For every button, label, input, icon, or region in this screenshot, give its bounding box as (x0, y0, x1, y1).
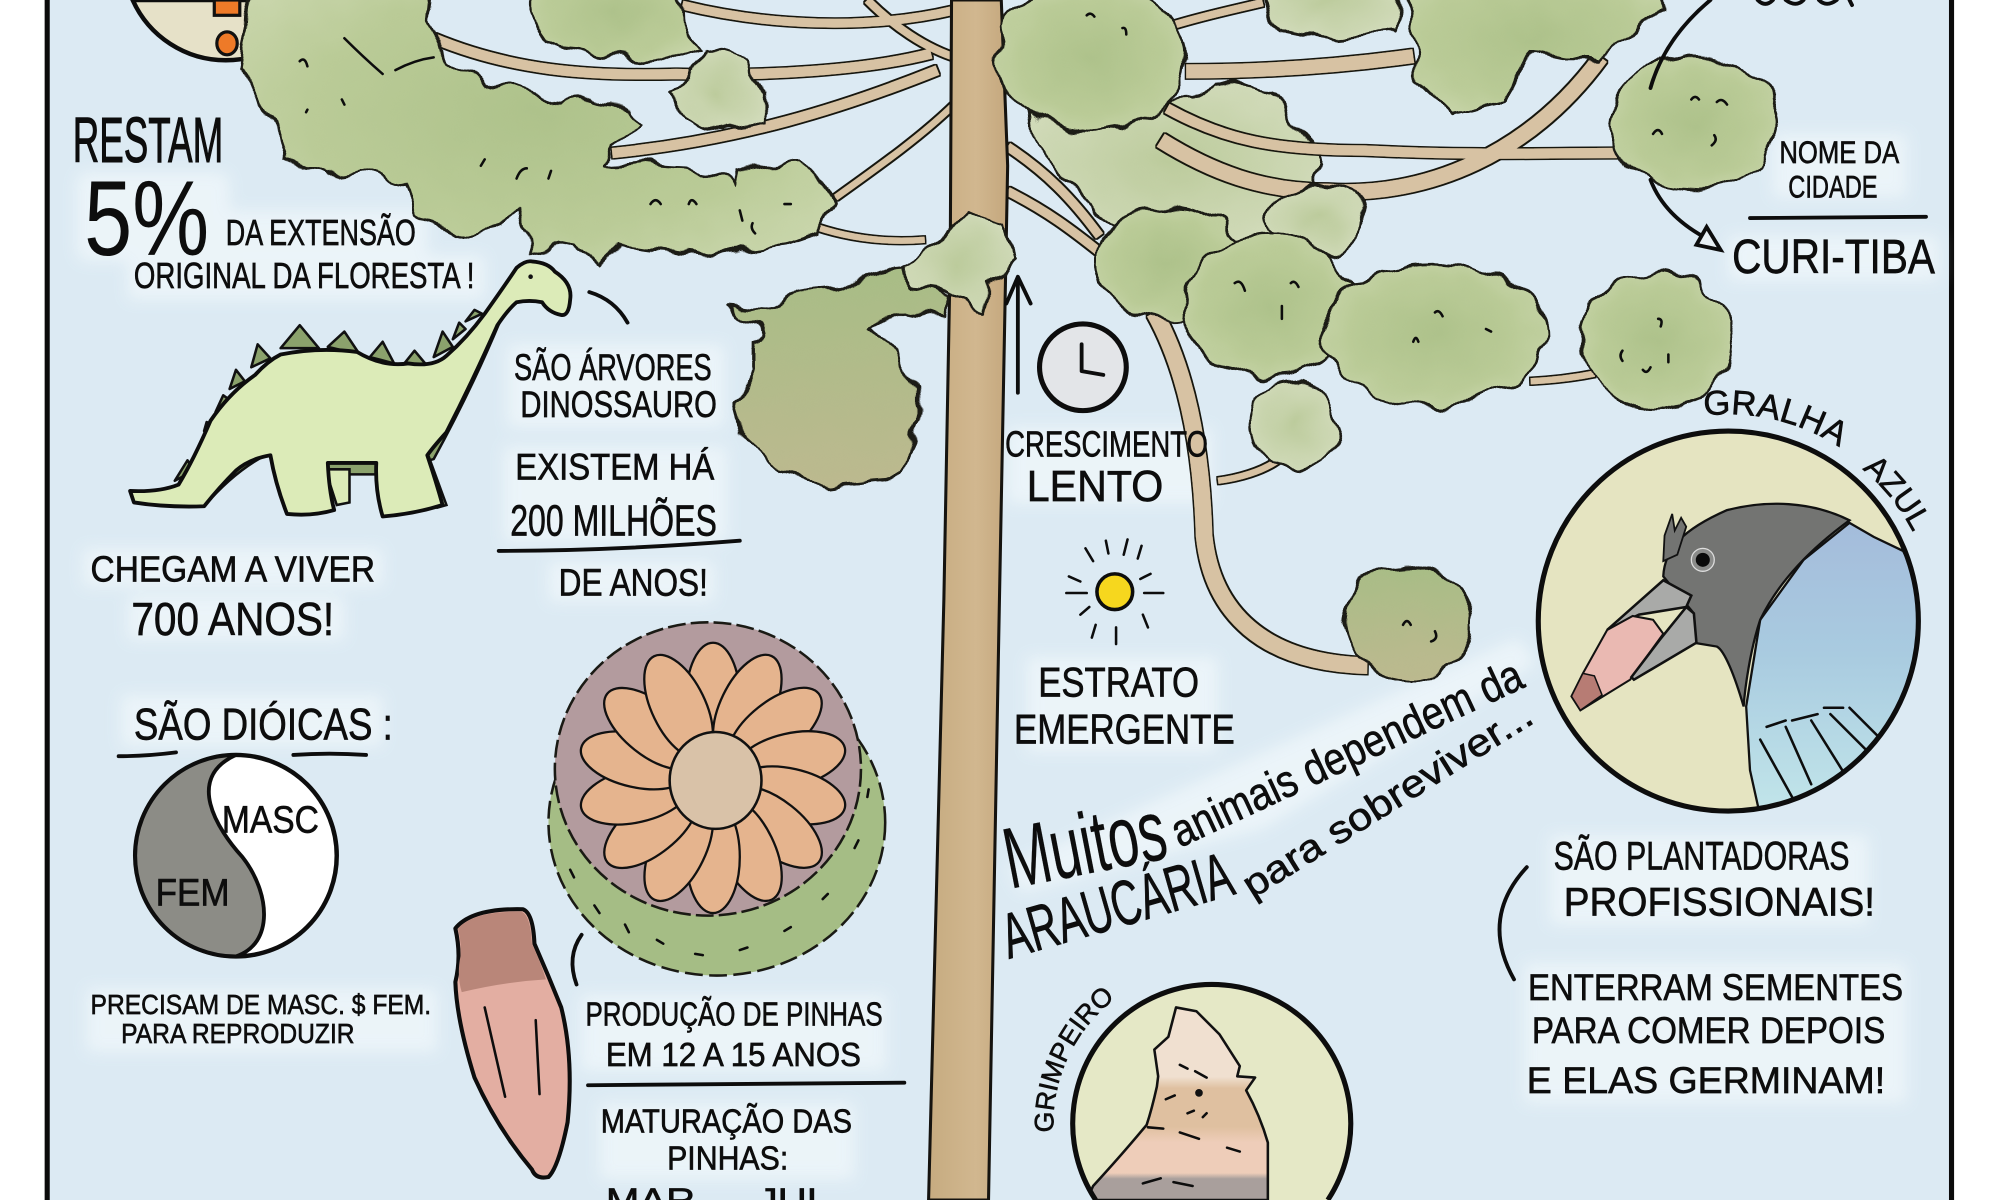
top-left medallion (133, 0, 319, 60)
caption: dioecious (91, 989, 431, 1049)
arrow head (1696, 227, 1721, 250)
cone core (670, 732, 761, 829)
dinosaur eye (528, 274, 533, 279)
dinosaur back spikes (175, 310, 482, 481)
divider (588, 1083, 904, 1085)
pupil (1696, 553, 1710, 567)
line: PINHAS: (667, 1140, 788, 1177)
dinosaur body (130, 261, 570, 516)
foliage: cluster D (1324, 263, 1546, 406)
icon: orange marks (214, 0, 240, 55)
text block: 700 years (91, 550, 375, 645)
line: PRODUÇÃO DE PINHAS (585, 995, 883, 1033)
line: CHEGAM A VIVER (91, 550, 375, 590)
bird (1571, 504, 1939, 816)
clock hands (1082, 344, 1103, 375)
pine seed in beak (1571, 616, 1663, 710)
foliage: pale small (670, 50, 765, 131)
medallion circle (133, 0, 319, 60)
cut-off text at top (1758, 0, 1852, 5)
body (1087, 1007, 1268, 1200)
heading: RESTAM 5% (73, 104, 474, 296)
illustration: grimpeiro (1073, 984, 1351, 1200)
arrow: curved to city name (1651, 0, 1710, 240)
foliage: cluster B (1267, 187, 1366, 254)
foliage: top centre (529, 0, 702, 64)
clock face (1040, 324, 1126, 411)
sun rays (1066, 539, 1163, 644)
white half (135, 755, 337, 956)
heading: dioicas (119, 700, 393, 756)
heading text: SÃO DIÓICAS : (134, 700, 393, 750)
line: EXISTEM HÁ (515, 446, 715, 487)
seed lines (485, 1007, 540, 1097)
line: PARA REPRODUZIR (121, 1018, 355, 1049)
text block: planters (1500, 835, 1903, 1101)
text block: pine production (585, 995, 904, 1200)
line: LENTO (1027, 463, 1163, 511)
line: MATURAÇÃO DAS (601, 1102, 852, 1140)
caption line 2: ORIGINAL DA FLORESTA ! (134, 256, 474, 296)
grey head and neck (1663, 504, 1849, 706)
foliage: cluster E (1580, 272, 1731, 409)
cone green marks (570, 789, 869, 955)
GRALHA: GRALHA (1704, 390, 1844, 448)
seed body (455, 909, 570, 1178)
icon: sun (1066, 539, 1163, 644)
percentage: 5% (84, 158, 209, 278)
foliage: lower left (730, 268, 950, 486)
line: CRESCIMENTO (1005, 425, 1208, 465)
foliage: top right of trunk (997, 0, 1186, 131)
foliage: cluster G (1250, 381, 1337, 468)
foliage: cluster C (1182, 236, 1356, 376)
callout stroke: dinosaur (589, 292, 628, 323)
illustration: pine cone (548, 622, 885, 976)
title arc: gralha azul (1704, 390, 1927, 532)
line: EM 12 A 15 ANOS (606, 1037, 861, 1074)
eye (1195, 1089, 1203, 1097)
line: PARA COMER DEPOIS (1532, 1010, 1885, 1051)
para sobreviver: para sobreviver... (1235, 693, 1541, 907)
icon: yin yang (135, 755, 337, 956)
blue body (1745, 522, 1916, 806)
text block: city name (1732, 134, 1936, 284)
foliage: cluster A (1094, 207, 1242, 319)
medallion (1073, 984, 1351, 1200)
line: NOME DA (1779, 134, 1900, 170)
line: CIDADE (1788, 169, 1878, 205)
bracket (1500, 867, 1527, 979)
head marks (1143, 1065, 1240, 1186)
divider (499, 541, 740, 551)
eye (1691, 548, 1714, 571)
medallion ring (1073, 984, 1351, 1200)
seed tip (1571, 673, 1602, 710)
text block: emergent stratum (1014, 658, 1235, 752)
illustration: gralha azul (1538, 431, 1939, 816)
foliage: cluster H (1346, 565, 1473, 677)
line: SÃO ÁRVORES (514, 347, 712, 388)
foliage marks (300, 14, 1727, 641)
lower beak (1631, 607, 1696, 680)
MASC label: MASC (222, 799, 319, 842)
underline marks (119, 752, 366, 756)
dinosaur far side (204, 321, 500, 506)
animais dependem da: animais dependem da (1162, 648, 1531, 857)
seed cap (458, 912, 546, 992)
icon: dinosaur (130, 261, 570, 516)
line: EMERGENTE (1014, 705, 1235, 752)
foliage: near trunk (908, 210, 1014, 312)
arrow: slow growth (1006, 277, 1031, 393)
divider (1750, 217, 1926, 218)
line: E ELAS GERMINAM! (1527, 1060, 1885, 1101)
FEM label: FEM (156, 871, 230, 914)
callout stroke: seed (572, 935, 582, 984)
line: SÃO PLANTADORAS (1554, 835, 1849, 879)
ARAUCARIA: ARAUCÁRIA (993, 838, 1241, 972)
pale back foliage (1026, 80, 1319, 242)
foliage clusters (242, 0, 1777, 677)
AZUL: AZUL (1862, 458, 1927, 532)
foliage: top strip (1255, 0, 1403, 38)
line: DE ANOS! (559, 562, 708, 605)
bird (1087, 1007, 1268, 1200)
line: PRECISAM DE MASC. $ FEM. (91, 989, 431, 1020)
grey half (135, 755, 264, 956)
crest (1663, 514, 1686, 561)
foliage: large left mass (242, 0, 835, 264)
Muitos: Muitos (995, 781, 1174, 907)
sun disc (1097, 574, 1133, 610)
upper beak (1607, 580, 1691, 630)
cone green base (548, 670, 885, 976)
text block: dinosaur trees (499, 347, 740, 605)
line: PROFISSIONAIS! (1564, 881, 1875, 925)
line: ESTRATO (1038, 658, 1199, 705)
dinosaur far legs (325, 453, 446, 508)
RESTAM label: RESTAM (73, 104, 223, 176)
medallion (1538, 431, 1918, 811)
label: grimpeiro: GRIMPEIRO (1034, 988, 1112, 1132)
feather marks (1760, 708, 1888, 797)
medallion ring (1538, 431, 1918, 811)
foliage: cluster F (1611, 55, 1777, 190)
line: CURI-TIBA (1732, 230, 1936, 284)
foliage: top right (1397, 0, 1671, 115)
icon: clock (1040, 324, 1126, 411)
tree trunk (929, 0, 1008, 1200)
cone purple interior (555, 622, 861, 916)
heading: animals depend (993, 648, 1541, 972)
line: 200 MILHÕES (510, 498, 717, 546)
caption line 1: DA EXTENSÃO (226, 213, 416, 253)
line: ENTERRAM SEMENTES (1528, 967, 1903, 1008)
illustration: pine seed (455, 909, 570, 1178)
line: 700 ANOS! (131, 593, 334, 645)
tree branches (434, 0, 1617, 666)
text block: slow growth (1005, 425, 1208, 511)
line: DINOSSAURO (520, 384, 717, 425)
cone scales (575, 643, 851, 913)
